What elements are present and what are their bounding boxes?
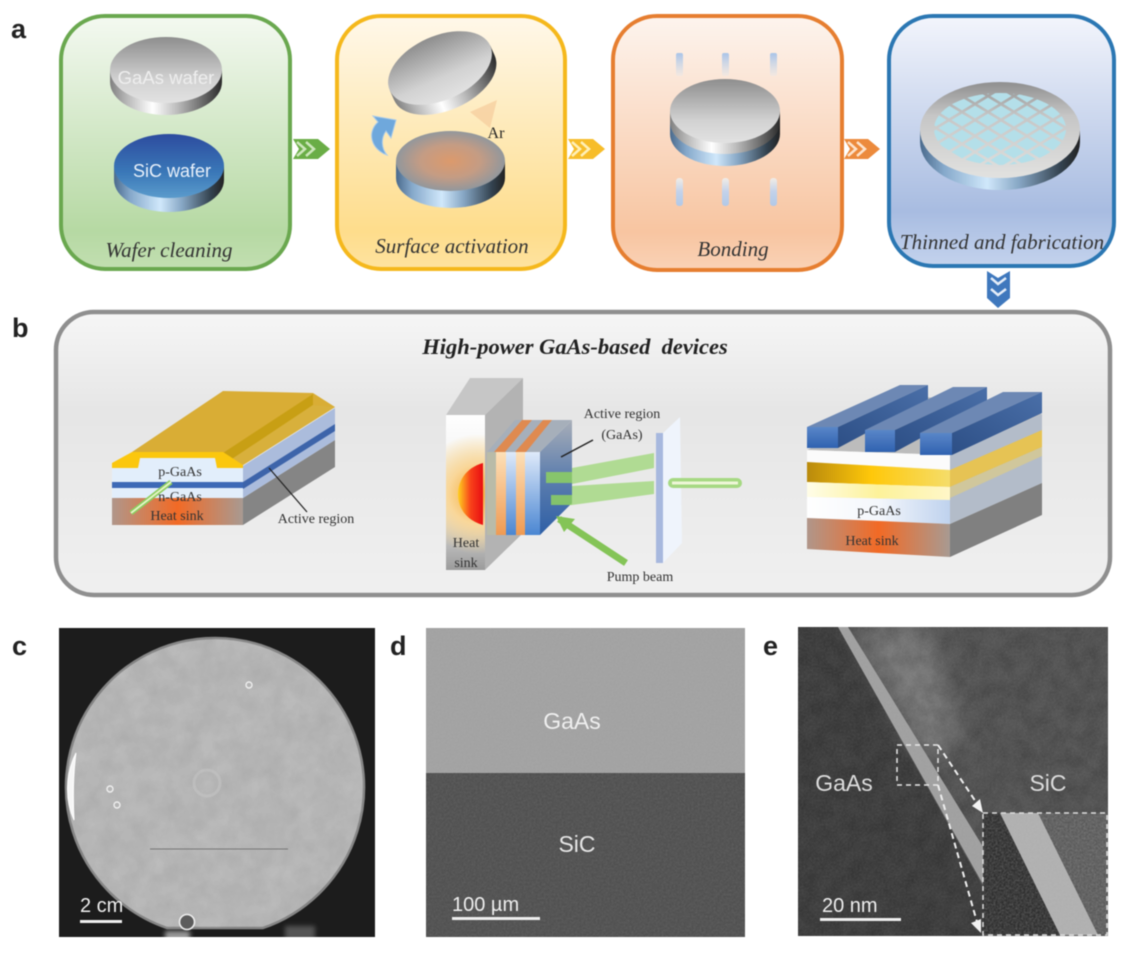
active region pointer — [561, 440, 593, 457]
panel: surface activation — [337, 16, 565, 269]
step caption: Thinned and fabrication — [900, 230, 1104, 254]
panel: wafer cleaning — [61, 16, 290, 269]
icon: tilted GaAs wafer — [377, 16, 508, 130]
device: VECSEL — [446, 378, 742, 585]
icon: SiC wafer — [114, 134, 224, 212]
arrow: yellow chevrons — [568, 139, 605, 159]
label GaAs: GaAs — [815, 770, 873, 796]
label pump beam: Pump beam — [607, 570, 673, 585]
dashed arrow lower — [938, 785, 981, 933]
panel label d: d — [390, 631, 406, 661]
scale label: 2 cm — [80, 895, 123, 917]
label n-GaAs: n-GaAs — [158, 490, 202, 505]
label active region: Active region — [278, 512, 354, 527]
pressure bars bottom — [676, 178, 777, 206]
scale bar — [820, 918, 901, 921]
label heat sink: Heat sink — [150, 509, 204, 524]
SiC region — [426, 773, 745, 937]
panel label c: c — [12, 631, 27, 661]
photo: bonded wafer — [59, 628, 375, 941]
panel label a: a — [11, 14, 27, 44]
arrow: orange chevrons — [844, 139, 880, 159]
label p-GaAs: p-GaAs — [857, 504, 901, 519]
scale bar — [452, 917, 540, 920]
active region pointer — [269, 468, 307, 512]
icon: GaAs wafer — [110, 37, 222, 115]
label Ar: Ar — [488, 125, 505, 142]
scale bar — [80, 920, 122, 923]
Ar beam — [470, 100, 497, 128]
TEM image: interface — [798, 627, 1108, 936]
icon: bonded wafer — [670, 79, 780, 166]
label GaAs: (GaAs) — [601, 428, 643, 443]
label SiC: SiC — [1029, 770, 1067, 796]
step caption: Surface activation — [375, 234, 529, 258]
icon: GaAs wafer: GaAs wafer — [118, 67, 214, 88]
panel label b: b — [12, 313, 28, 343]
device: ridge array — [807, 385, 1042, 557]
label heat sink: Heat sink — [845, 534, 899, 549]
icon: activated SiC wafer — [396, 131, 505, 208]
device: edge-emitting laser — [112, 391, 354, 527]
scale label: 20 nm — [822, 895, 878, 917]
icon: rotate arrow — [372, 116, 396, 155]
label active region: Active region — [584, 407, 660, 422]
heading: High-power GaAs-based devices — [421, 334, 728, 359]
GaAs region — [426, 628, 745, 773]
step caption: Bonding — [697, 237, 769, 261]
arrow: blue down chevrons — [987, 271, 1010, 308]
zoom box — [897, 745, 938, 785]
panel: bonding — [613, 16, 842, 270]
label p-GaAs: p-GaAs — [158, 465, 202, 480]
panel label e: e — [763, 631, 778, 661]
scale label: 100 µm — [452, 894, 519, 916]
label SiC: SiC — [558, 831, 596, 857]
panel: thinned and fabrication — [889, 16, 1114, 266]
arrow: green chevrons — [293, 139, 330, 159]
panel: high-power devices — [56, 312, 1110, 595]
icon: fabricated wafer — [920, 82, 1080, 190]
label sink: sink — [454, 556, 478, 571]
dashed arrow upper — [938, 745, 983, 813]
label heat: Heat — [453, 536, 479, 551]
icon: SiC wafer: SiC wafer — [133, 161, 211, 181]
SEM image: interface — [426, 628, 745, 937]
pressure bars top — [676, 53, 777, 76]
label GaAs: GaAs — [543, 708, 601, 734]
step caption: Wafer cleaning — [106, 238, 232, 262]
inset — [983, 813, 1107, 935]
